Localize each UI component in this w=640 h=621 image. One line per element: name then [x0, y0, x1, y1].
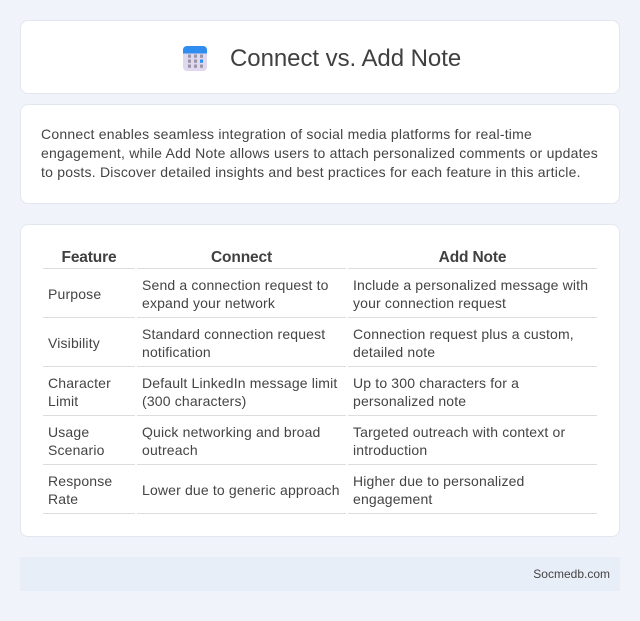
title: Connect vs. Add Note	[230, 45, 461, 72]
row: visibility: Connection request plus a custom,	[353, 326, 574, 342]
row: visibility: Standard connection request	[142, 326, 325, 342]
row: usage scenario: Quick networking and broad	[142, 424, 320, 440]
icon: calendar	[183, 46, 207, 71]
row: visibility: notification	[142, 344, 211, 360]
row: response rate	[48, 473, 524, 507]
comparison table panel	[20, 224, 620, 537]
footer bar	[20, 557, 620, 591]
footer text: Socmedb.com	[533, 567, 610, 581]
table header: Connect	[211, 249, 272, 266]
row: response rate: Response	[48, 473, 112, 489]
intro text: Connect enables seamless integration of social media platforms for real-time	[41, 126, 532, 142]
row: visibility	[48, 326, 574, 360]
row: usage scenario: outreach	[142, 442, 198, 458]
row: visibility: Visibility	[48, 335, 100, 351]
intro panel	[20, 104, 620, 204]
table header	[62, 249, 506, 266]
table header: Feature	[62, 249, 116, 266]
row: purpose: Include a personalized message with	[353, 277, 588, 293]
row: character limit: Default LinkedIn message limit	[142, 375, 337, 391]
intro text: to posts. Discover detailed insights and best practices for each feature in this article.	[41, 164, 581, 180]
row: response rate: Lower due to generic approach	[142, 482, 340, 498]
row: purpose: expand your network	[142, 295, 275, 311]
row: usage scenario: Targeted outreach with context or	[353, 424, 565, 440]
row: response rate: Higher due to personalized	[353, 473, 524, 489]
row: purpose: Send a connection request to	[142, 277, 329, 293]
table header: Add Note	[439, 249, 506, 266]
row: character limit: Character	[48, 375, 111, 391]
row: character limit: Up to 300 characters for a	[353, 375, 519, 391]
row: visibility: detailed note	[353, 344, 435, 360]
row: response rate: engagement	[353, 491, 432, 507]
row: character limit: (300 characters)	[142, 393, 246, 409]
title panel	[20, 20, 620, 94]
intro text: engagement, while Add Note allows users to attach personalized comments or updates	[41, 145, 598, 161]
row: response rate: Rate	[48, 491, 78, 507]
row: purpose: your connection request	[353, 295, 506, 311]
row: character limit: personalized note	[353, 393, 466, 409]
intro text	[41, 126, 598, 180]
row: usage scenario	[48, 424, 565, 458]
row: purpose	[48, 277, 588, 311]
row: usage scenario: Scenario	[48, 442, 105, 458]
row: purpose: Purpose	[48, 286, 101, 302]
row: usage scenario: Usage	[48, 424, 89, 440]
row: character limit: Limit	[48, 393, 78, 409]
row: character limit	[48, 375, 519, 409]
row: usage scenario: introduction	[353, 442, 427, 458]
